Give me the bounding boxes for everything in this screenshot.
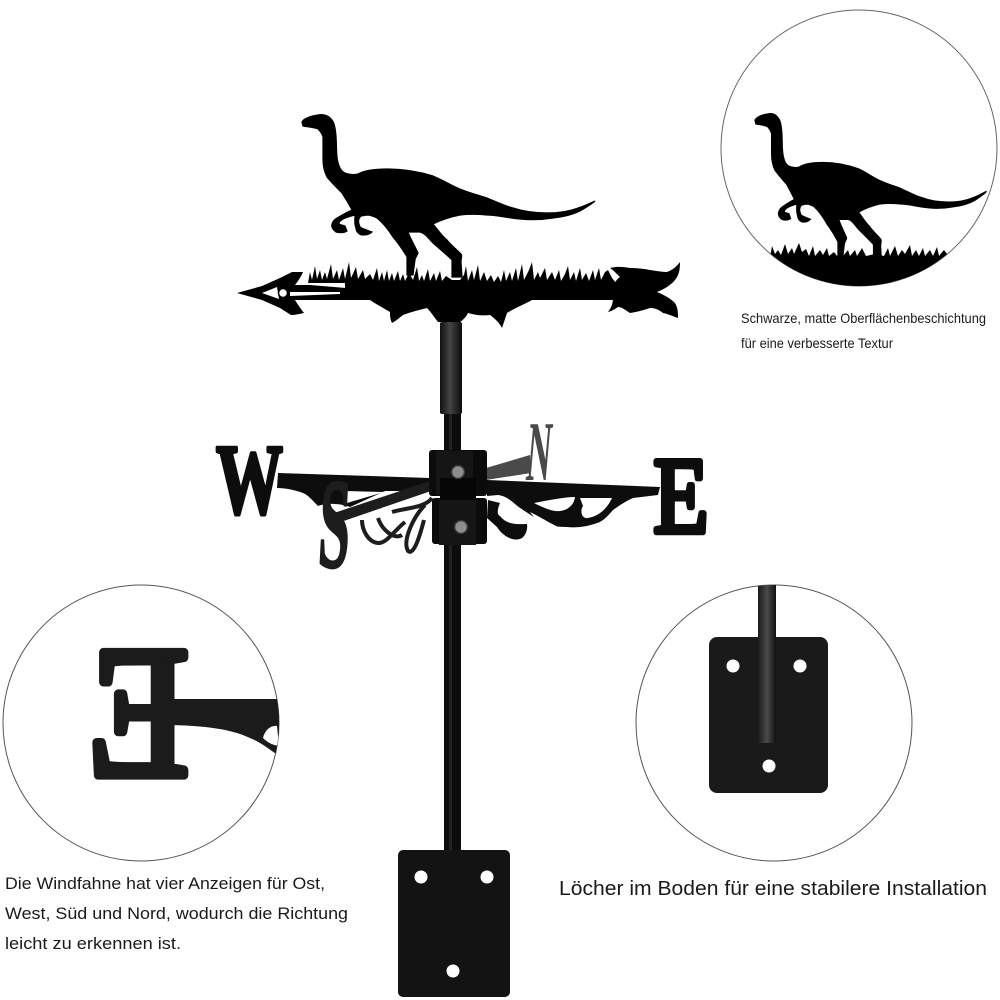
east arm cut-outs [530, 497, 612, 527]
caption: compass letters: Die Windfahne hat vier Anzeigen für Ost, [5, 874, 325, 893]
caption: mounting holes: Löcher im Boden für eine stabilere Installation [559, 878, 987, 900]
west arm cut-out [345, 491, 384, 503]
compass arm: north [486, 405, 555, 500]
compass arm: east with ornament [487, 435, 708, 556]
caption: matte coating [741, 310, 986, 351]
compass arm: west [216, 425, 430, 535]
caption: compass letters: leicht zu erkennen ist. [5, 934, 181, 953]
caption: compass letters: West, Süd und Nord, wodurch die Richtung [5, 904, 348, 923]
bolt lower [454, 520, 468, 534]
base plate [398, 850, 510, 997]
compass arm: north: N [523, 405, 555, 500]
compass arm: east with ornament: E [654, 435, 708, 556]
arrow head and shaft [237, 272, 370, 315]
detail circle: matte coating [721, 10, 997, 290]
detail circle: compass letter E [3, 585, 282, 861]
detail circle: compass letter E: E [88, 610, 189, 816]
tail feather [608, 262, 680, 318]
center mounting bracket [429, 450, 487, 545]
weathervane pole [440, 322, 462, 852]
dinosaur silhouette on the vane [302, 115, 595, 277]
caption: matte coating: Schwarze, matte Oberflächenbeschichtung [741, 310, 986, 326]
caption: compass letters [5, 874, 348, 953]
compass arm: south with ornament [316, 453, 434, 596]
bolt upper [452, 466, 464, 478]
compass arm: west: W [216, 425, 283, 535]
arrow head cut-outs [262, 287, 340, 299]
compass arm: south with ornament: S [316, 453, 354, 596]
caption: matte coating: für eine verbesserte Textur [741, 335, 893, 351]
grass body [308, 262, 617, 328]
detail circle: mounting plate [636, 585, 912, 861]
arrow vane with grass [237, 262, 680, 328]
